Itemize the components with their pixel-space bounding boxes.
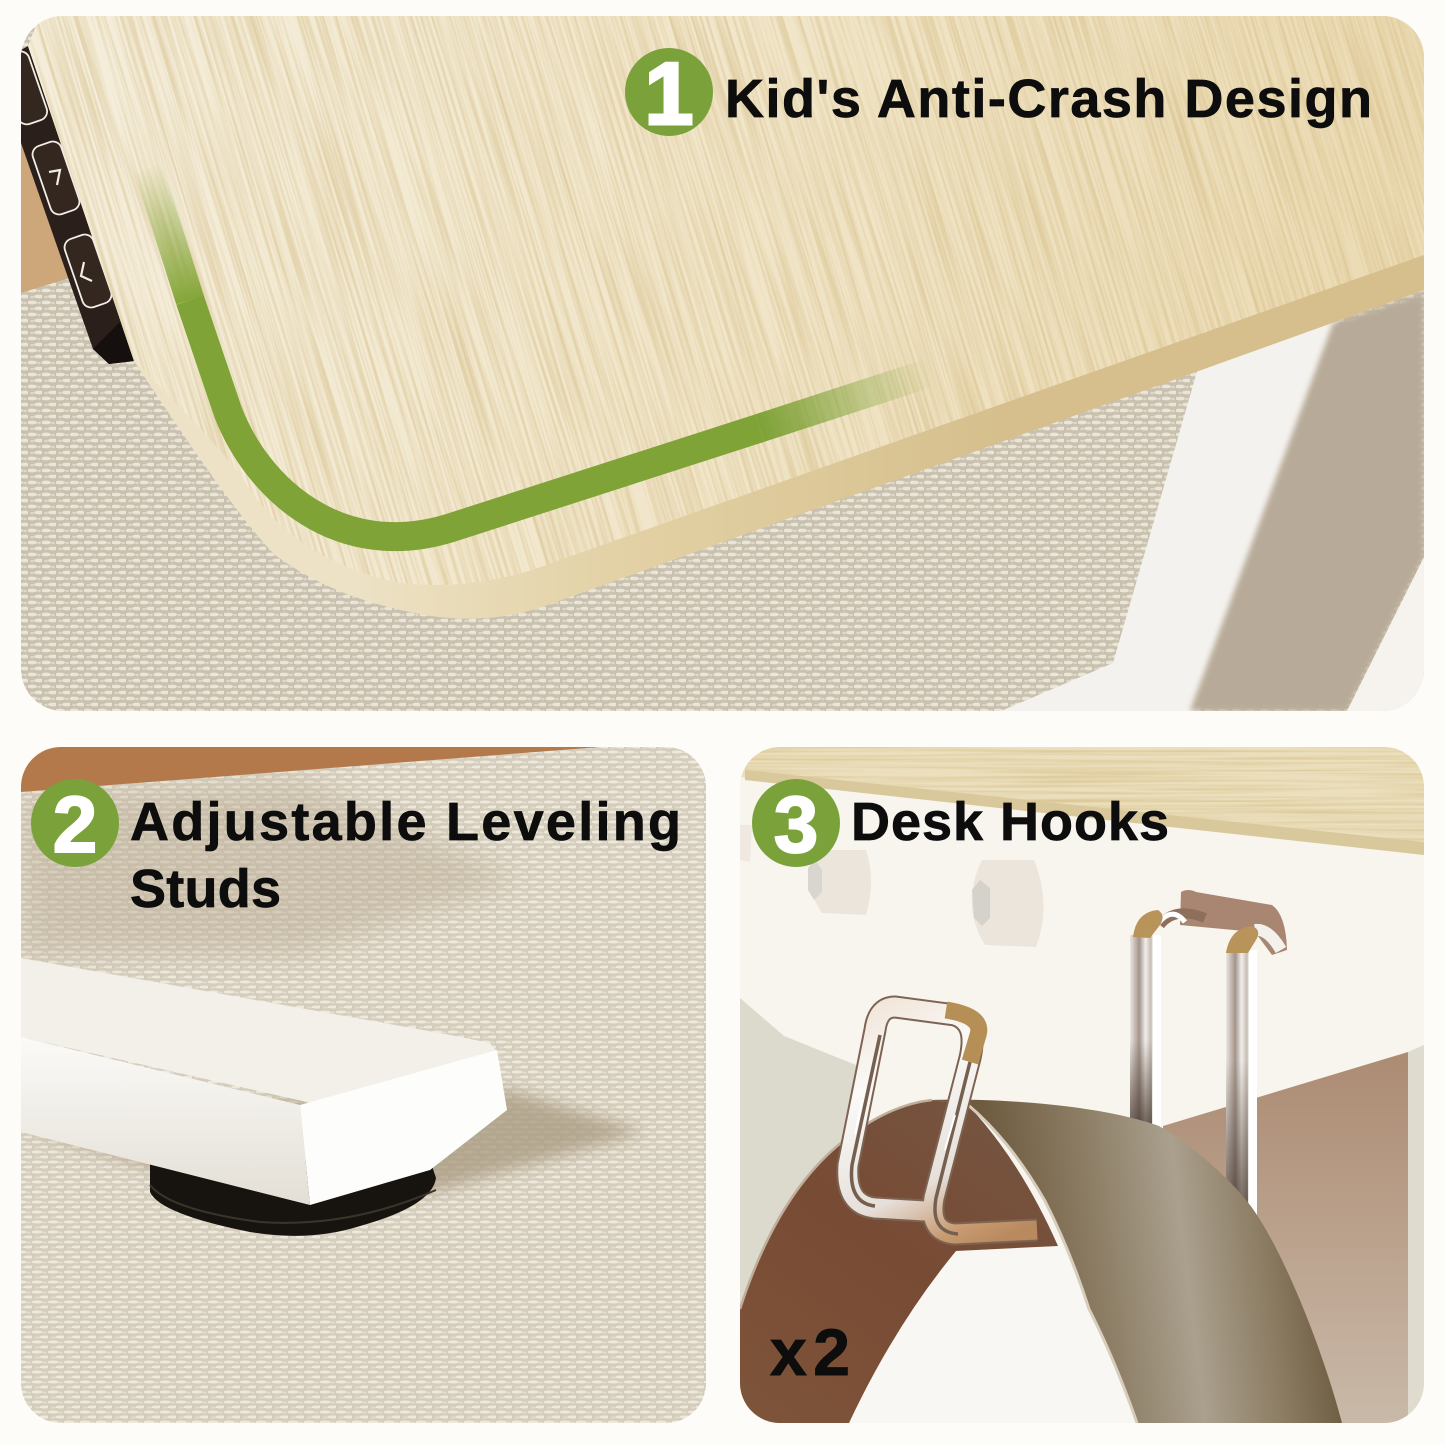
wood floor strip	[21, 100, 92, 293]
quantity label x2: x2	[770, 1315, 850, 1389]
control keypad	[21, 46, 134, 364]
keypad buttons	[21, 50, 112, 308]
number badge 2	[31, 779, 119, 869]
carpet shadow band	[21, 780, 520, 955]
heading 2: Adjustable Leveling	[130, 792, 681, 852]
green edge highlight stripe	[148, 168, 932, 537]
wood floor	[21, 747, 600, 792]
number badge 3: 3	[774, 780, 818, 869]
desktop surface	[28, 16, 1424, 619]
leveling foot	[150, 1160, 436, 1236]
interior white of headband	[845, 1240, 1140, 1423]
keypad chevrons	[49, 170, 92, 281]
panel: desk hooks	[740, 747, 1424, 1423]
number badge 3	[752, 779, 840, 869]
panel: kid's anti-crash design	[0, 0, 1445, 711]
heading 2	[130, 792, 681, 919]
heading 1: Kid's Anti-Crash Design	[725, 69, 1372, 129]
white base bar	[21, 958, 507, 1205]
back hook	[1130, 890, 1287, 1230]
title: kid's anti-crash design	[625, 44, 1372, 143]
number badge 1: 1	[645, 44, 693, 143]
desk underside	[740, 778, 1424, 1360]
right brown wall	[1163, 1052, 1408, 1423]
rails	[1130, 935, 1161, 1135]
heading 3: Desk Hooks	[851, 792, 1169, 852]
rail caps	[1133, 910, 1163, 938]
screw pegs	[740, 825, 1044, 947]
number badge 2: 2	[53, 780, 97, 869]
carpet floor	[21, 16, 1424, 711]
white desk leg	[1001, 293, 1424, 711]
left wall	[740, 998, 860, 1400]
front hook	[848, 1007, 1037, 1234]
headband inner brown face	[740, 1100, 1058, 1423]
title: desk hooks	[752, 779, 1169, 869]
heading 2: Studs	[130, 859, 281, 919]
desktop strip	[740, 747, 1424, 855]
title: adjustable leveling studs	[31, 779, 681, 919]
carpet	[21, 747, 706, 1423]
headband outer face	[932, 1100, 1342, 1423]
bar shadow on carpet	[21, 1090, 645, 1215]
mounting plate	[1180, 890, 1287, 955]
number badge 1	[625, 44, 713, 143]
panel: adjustable leveling studs	[21, 747, 706, 1423]
connector	[1160, 913, 1205, 925]
